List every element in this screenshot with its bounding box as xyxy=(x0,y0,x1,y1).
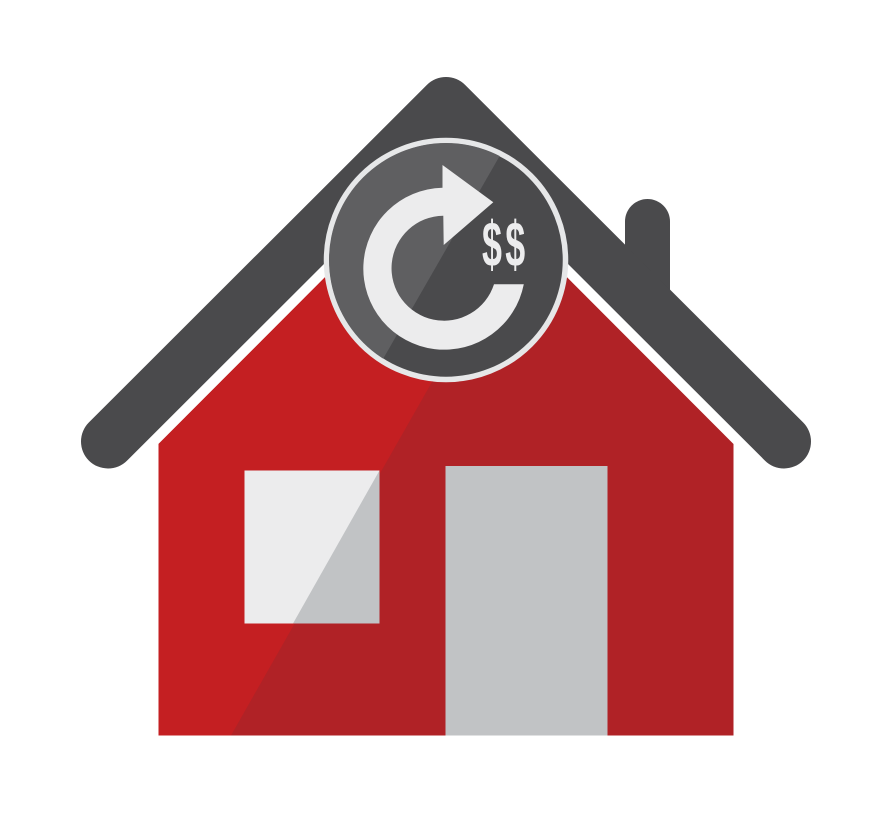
chimney xyxy=(625,199,670,300)
dollar signs: $$ xyxy=(482,208,529,280)
refinance badge xyxy=(300,138,566,380)
door xyxy=(446,466,608,736)
house body xyxy=(158,156,734,736)
icon: circular arrow xyxy=(363,165,524,350)
window xyxy=(244,470,380,624)
badge highlight xyxy=(329,143,500,359)
badge disc xyxy=(326,140,566,380)
roof xyxy=(108,104,784,442)
infographic: house with refinance badge xyxy=(81,77,811,736)
